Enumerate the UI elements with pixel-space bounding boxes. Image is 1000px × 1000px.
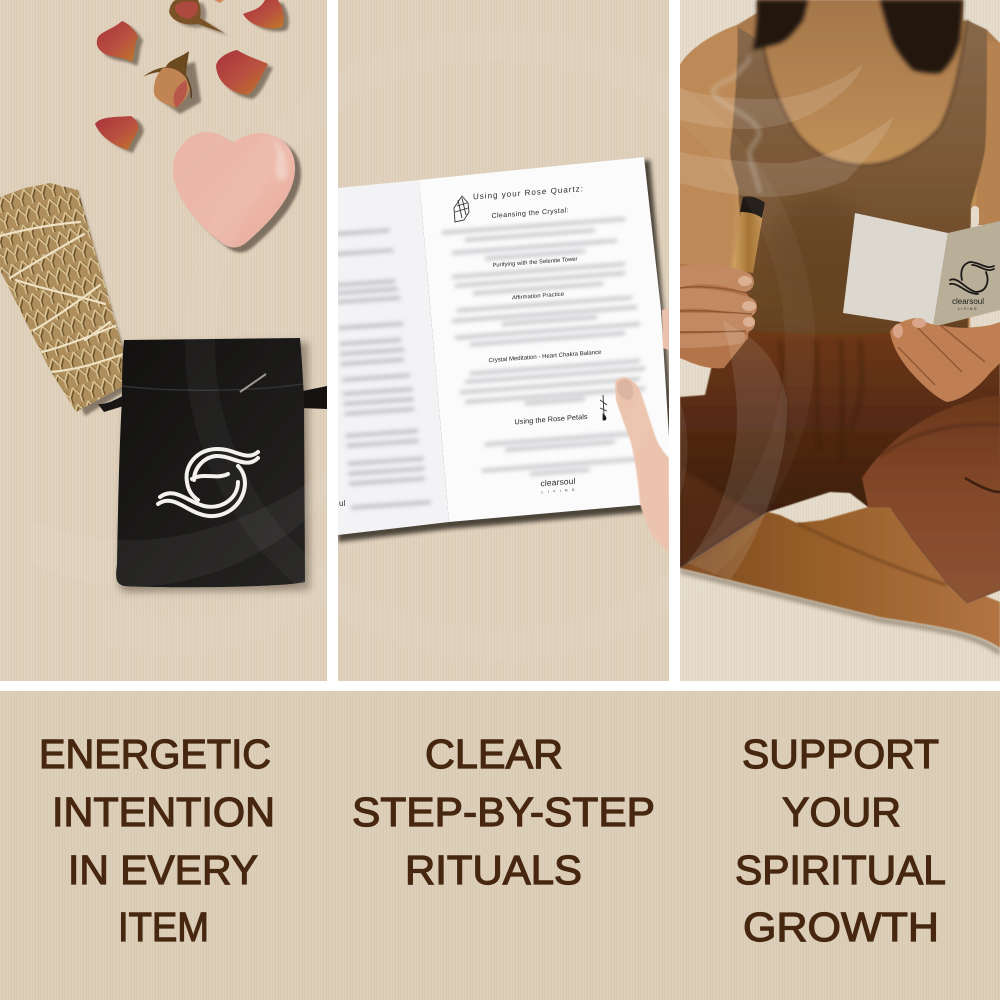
booklet shadow	[338, 160, 676, 542]
top rosebud	[169, 0, 229, 36]
booklet headings: Purifying with the Selenite Tower	[492, 257, 578, 269]
sage smudge bundle	[0, 183, 135, 416]
palo santo stick	[732, 196, 765, 273]
caption: energetic intention in every item: INTENTION	[52, 789, 275, 835]
open booklet with logo: LIVING	[958, 307, 978, 311]
pants	[680, 325, 1000, 603]
right hand	[890, 318, 1000, 402]
logo on pouch	[158, 449, 258, 516]
panel: woman reading with palo santo	[680, 0, 1000, 681]
caption: support your spiritual growth: SUPPORT	[742, 731, 939, 777]
panel: pouch, sage and rose quartz	[0, 0, 327, 596]
booklet right page	[419, 157, 670, 522]
open booklet with logo	[843, 213, 1000, 327]
caption: energetic intention in every item	[39, 731, 275, 950]
booklet headings: Using your Rose Quartz:	[473, 184, 583, 201]
booklet left page: ul	[339, 499, 345, 508]
caption: energetic intention in every item: ITEM	[118, 904, 209, 950]
booklet headings: Crystal Meditation - Heart Chakra Balance	[488, 350, 602, 364]
watermark: translucent swirl crescents	[30, 45, 893, 654]
caption: energetic intention in every item: IN EVERY	[68, 847, 258, 893]
hand holding page	[615, 308, 669, 552]
hair	[753, 0, 963, 73]
booklet headings	[473, 183, 602, 499]
caption: clear step-by-step rituals: STEP-BY-STEP	[352, 789, 655, 835]
caption: support your spiritual growth: SPIRITUAL	[735, 847, 946, 893]
caption: support your spiritual growth: YOUR	[782, 789, 901, 835]
rosebud	[143, 51, 201, 114]
tank top	[730, 20, 987, 335]
crossed legs	[680, 507, 1000, 653]
logo on booklet	[950, 262, 994, 294]
booklet headings: LIVING	[541, 488, 575, 494]
booklet headings: Affirmation Practice	[512, 292, 564, 301]
panel dividers	[0, 0, 1000, 691]
booklet headings: Using the Rose Petals	[514, 412, 588, 426]
caption: clear step-by-step rituals: RITUALS	[405, 847, 582, 893]
caption: clear step-by-step rituals	[352, 731, 655, 893]
icon: crystal sketch	[454, 196, 469, 222]
icon: rose sketch	[600, 395, 607, 420]
booklet headings: Cleansing the Crystal:	[492, 207, 569, 220]
panel: open ritual booklet	[338, 157, 669, 552]
caption: support your spiritual growth: GROWTH	[743, 904, 939, 950]
caption: support your spiritual growth	[735, 731, 946, 950]
caption: clear step-by-step rituals: CLEAR	[425, 731, 563, 777]
caption: energetic intention in every item: ENERGETIC	[39, 731, 271, 777]
rose quartz heart	[173, 132, 301, 252]
black drawstring pouch	[98, 338, 327, 592]
figure arms and shoulders	[680, 0, 1000, 330]
left hand	[680, 264, 756, 368]
booklet headings: clearsoul	[540, 476, 576, 488]
rose petals	[95, 0, 289, 153]
blurred instructions text	[442, 218, 645, 481]
smoke wisp	[713, 56, 760, 193]
open booklet with logo: clearsoul	[952, 297, 984, 306]
booklet left page	[332, 180, 449, 535]
